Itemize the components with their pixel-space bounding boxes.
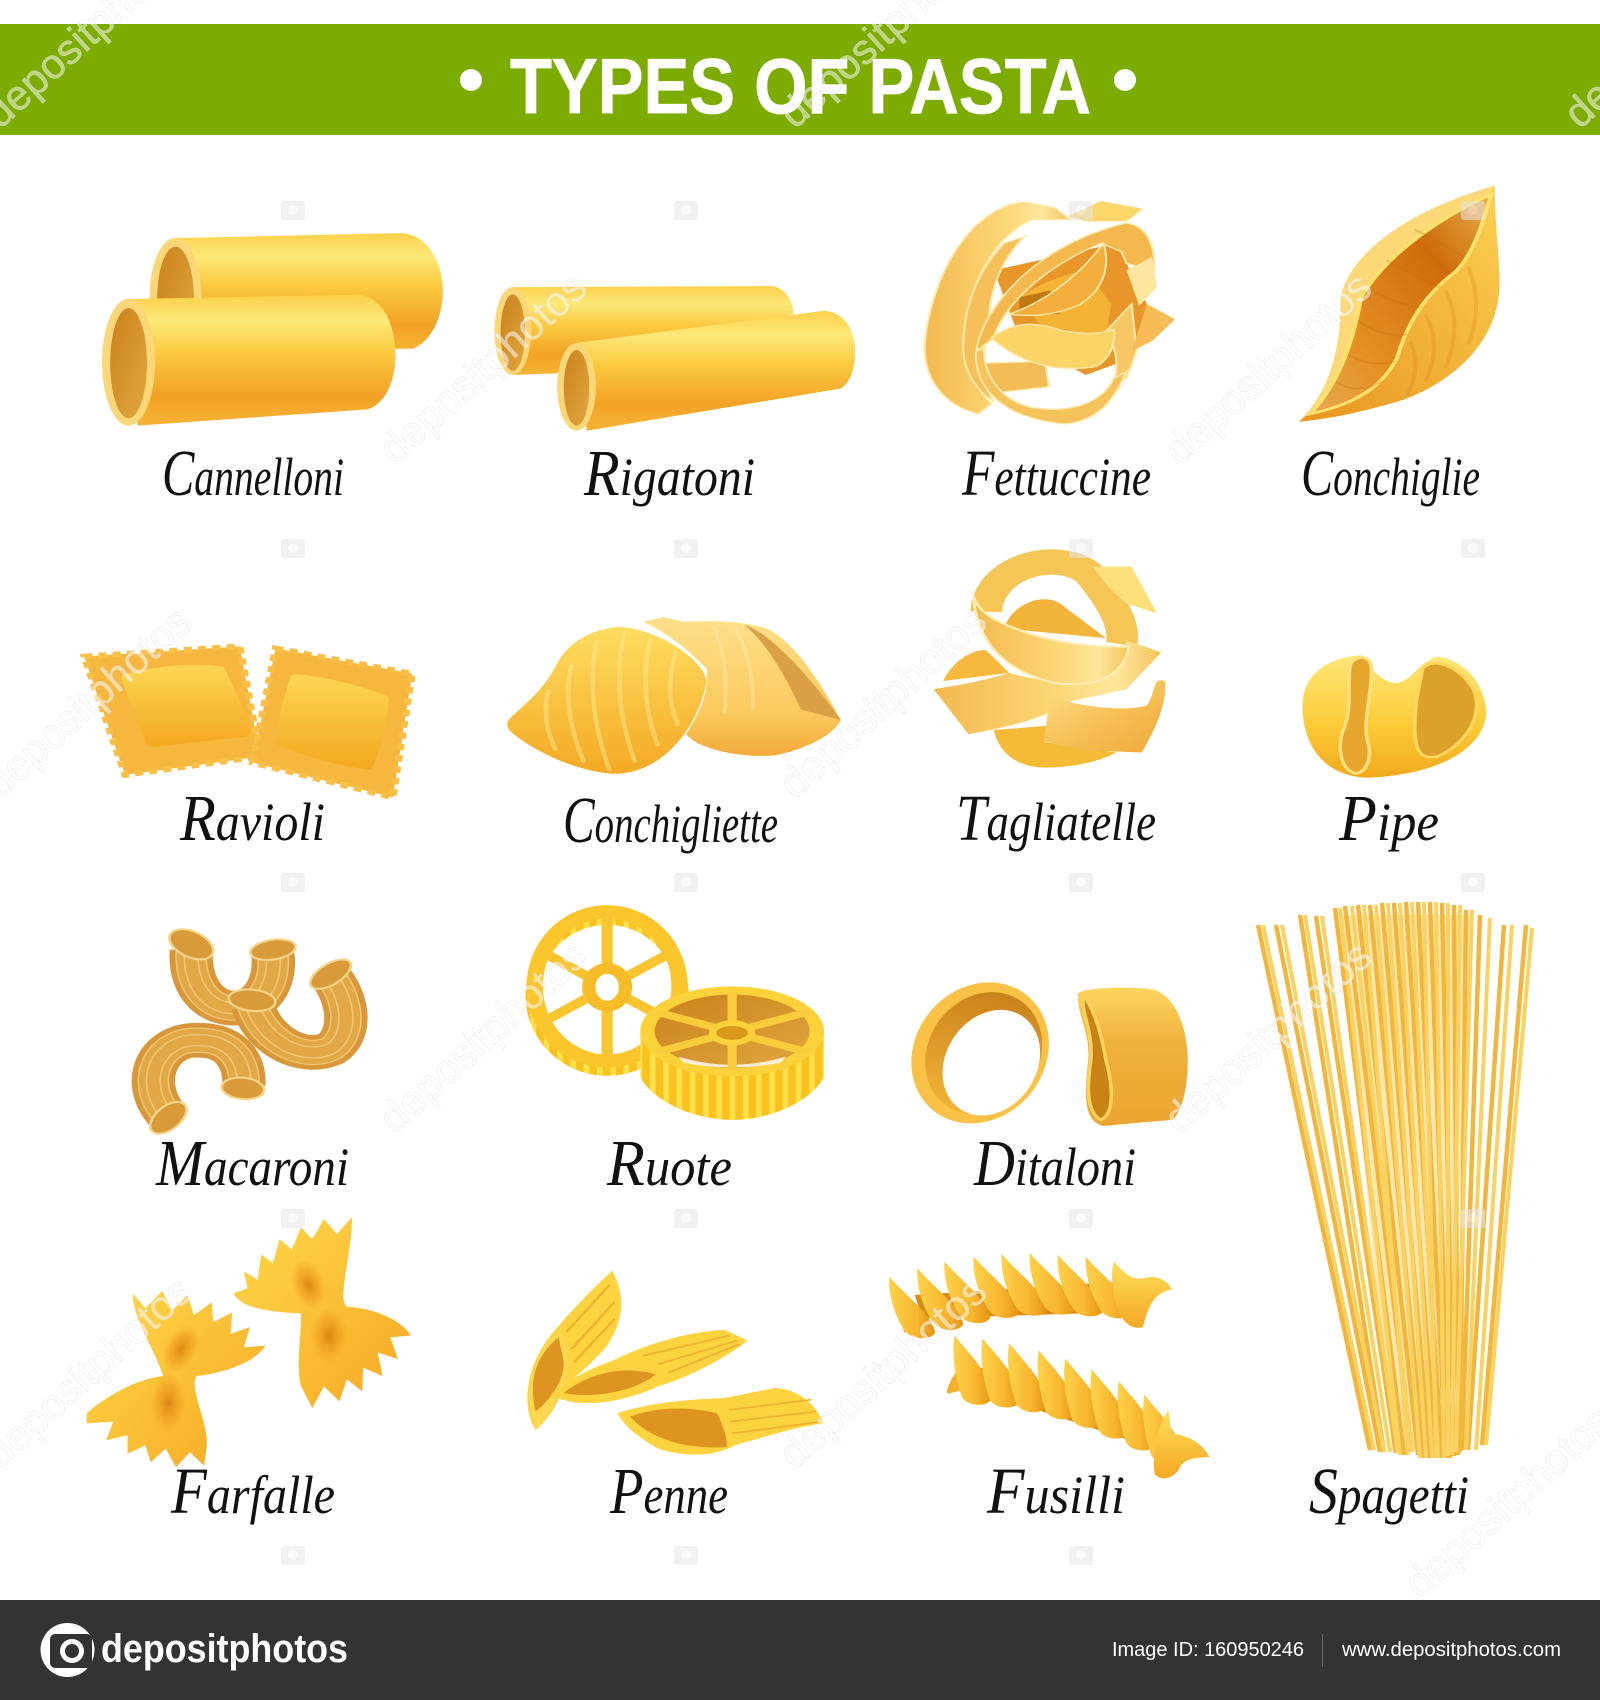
pasta: farfalle xyxy=(87,1217,411,1467)
watermark layer: depositphotos xyxy=(770,597,995,807)
brand name: depositphotos xyxy=(101,1627,348,1671)
label: Cannelloni: Cannelloni xyxy=(162,437,344,510)
pasta: ditaloni xyxy=(893,971,1188,1135)
pasta: ravioli xyxy=(84,646,412,797)
watermark layer: depositphotos xyxy=(1155,263,1380,473)
pasta: spaghetti xyxy=(1258,902,1532,1458)
label: Conchiglie: Conchiglie xyxy=(1301,437,1480,510)
label: Fettuccine: Fettuccine xyxy=(961,437,1151,510)
website: www.depositphotos.com xyxy=(1341,1639,1561,1661)
label: Penne: Penne xyxy=(609,1455,728,1528)
pasta: conchiglie xyxy=(1299,186,1499,422)
pasta: fettuccine xyxy=(925,201,1175,424)
title bullet right xyxy=(1114,69,1136,91)
label: Conchigliette: Conchigliette xyxy=(563,784,778,857)
label: Ditaloni: Ditaloni xyxy=(973,1127,1136,1200)
pasta: conchigliette xyxy=(507,617,841,774)
title bullet left xyxy=(460,69,482,91)
pasta: pipe xyxy=(1303,655,1486,778)
watermark layer: depositphotos xyxy=(770,1267,995,1477)
label: Ruote: Ruote xyxy=(606,1127,732,1200)
pasta: fusilli xyxy=(889,1253,1210,1478)
image id: Image ID: 160950246 xyxy=(1112,1639,1304,1661)
watermark layer: depositphotos xyxy=(370,263,595,473)
label: Farfalle: Farfalle xyxy=(170,1455,335,1528)
pasta: rigatoni xyxy=(494,286,855,431)
pasta: penne xyxy=(527,1271,824,1455)
footer bar xyxy=(0,1600,1600,1700)
pasta: cannelloni xyxy=(102,233,443,426)
label: Spagetti: Spagetti xyxy=(1309,1455,1469,1528)
watermark layer: depositphotos xyxy=(1155,932,1380,1142)
pasta: tagliatelle xyxy=(934,562,1165,768)
title: Types of Pasta: TYPES OF PASTA xyxy=(510,42,1091,130)
title banner xyxy=(0,24,1600,135)
label: Macaroni: Macaroni xyxy=(155,1127,349,1200)
watermark layer: depositphotos xyxy=(370,932,595,1142)
icon: camera logo xyxy=(40,1623,94,1677)
pasta: ruote xyxy=(532,912,824,1120)
label: Rigatoni: Rigatoni xyxy=(583,437,755,510)
pasta: macaroni xyxy=(143,923,357,1139)
label: Fusilli: Fusilli xyxy=(986,1455,1125,1528)
label: Ravioli: Ravioli xyxy=(179,782,325,855)
label: Pipe: Pipe xyxy=(1338,782,1439,855)
label: Tagliatelle: Tagliatelle xyxy=(956,782,1156,855)
